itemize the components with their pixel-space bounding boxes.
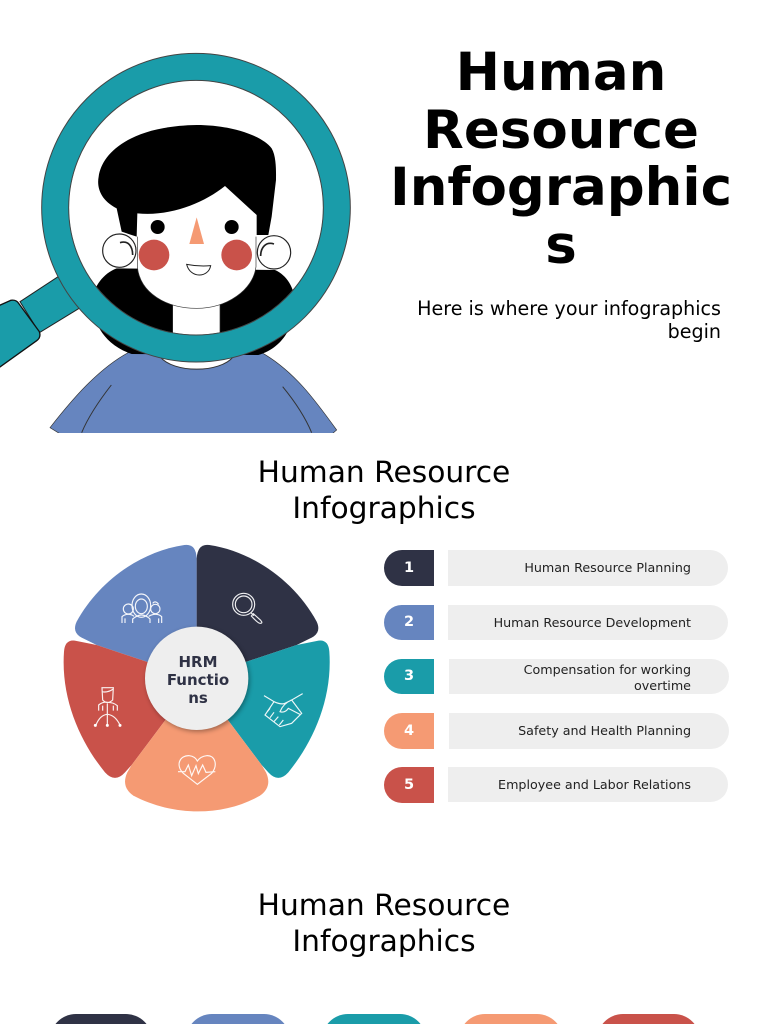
number 3 [384, 659, 434, 694]
center circle [145, 627, 248, 730]
list row 5 [384, 767, 728, 803]
smile [187, 264, 211, 275]
magnifier handle [0, 270, 90, 369]
neck [173, 303, 220, 337]
magnifier ring [42, 53, 350, 362]
title [390, 42, 732, 276]
number 2: 2 [404, 614, 414, 630]
title: Human [456, 42, 666, 103]
center label [167, 652, 229, 706]
right ear [257, 236, 291, 269]
icon: org person [96, 688, 120, 725]
heading 2: Infographics [292, 924, 476, 958]
bottom card 2 [186, 1014, 290, 1024]
hair [98, 125, 276, 237]
list row 2 [384, 605, 728, 640]
heading 2 [258, 888, 510, 958]
bottom card 3 [322, 1014, 426, 1024]
number 3: 3 [404, 668, 414, 684]
segment: teal [197, 641, 330, 778]
list row 1 [384, 550, 728, 586]
label 5: Employee and Labor Relations [498, 777, 691, 792]
icon: team [122, 594, 162, 623]
label 3 [449, 659, 729, 694]
eyes [151, 220, 239, 234]
number 2 [384, 605, 434, 640]
number 4 [384, 713, 434, 749]
illustration: person under magnifying glass [0, 52, 351, 433]
icon: magnifier [233, 593, 262, 623]
label 3: overtime [634, 678, 691, 693]
label 3: Compensation for working [524, 662, 691, 677]
number 1 [384, 550, 434, 586]
number 5: 5 [404, 777, 414, 793]
shirt [50, 352, 337, 440]
nose [189, 217, 204, 244]
label 4: Safety and Health Planning [518, 723, 691, 738]
heading 1 [258, 455, 510, 526]
subtitle: Here is where your infographics begin [417, 297, 721, 342]
center label: ns [188, 688, 208, 706]
number 4: 4 [404, 723, 414, 739]
label 2: Human Resource Development [494, 615, 691, 630]
icon: heart [178, 756, 215, 784]
center circle shadow [146, 628, 250, 732]
label 4 [449, 713, 729, 749]
bottom card 5 [597, 1014, 700, 1024]
icon: handshake [264, 694, 303, 727]
left ear [103, 234, 136, 267]
segment: red [64, 641, 197, 778]
heading 2: Human Resource [258, 888, 510, 923]
label 1: Human Resource Planning [524, 560, 691, 575]
heading 1: Human Resource [258, 455, 510, 490]
segment: dark [197, 545, 318, 678]
number 5 [384, 767, 434, 803]
title: s [545, 214, 577, 276]
back hair [93, 268, 295, 355]
collar [160, 357, 233, 369]
segment: blue [75, 545, 197, 678]
jaw line [137, 237, 256, 308]
bottom card 4 [459, 1014, 563, 1024]
number 1: 1 [404, 560, 414, 576]
list row 3 [384, 659, 729, 694]
title: Resource [423, 100, 699, 160]
center label: Functio [167, 670, 229, 688]
list row 4 [384, 713, 729, 749]
heading 1: Infographics [292, 490, 476, 526]
segment: orange [125, 678, 268, 811]
bottom card 1 [50, 1014, 152, 1024]
cheeks [139, 240, 252, 270]
label 1 [448, 550, 728, 586]
center label: HRM [178, 652, 218, 670]
head [137, 207, 256, 308]
icon: org nodes [94, 724, 122, 727]
label 5 [448, 767, 728, 802]
title: Infographic [390, 157, 732, 218]
wheel chart [64, 544, 330, 812]
label 2 [448, 605, 728, 640]
